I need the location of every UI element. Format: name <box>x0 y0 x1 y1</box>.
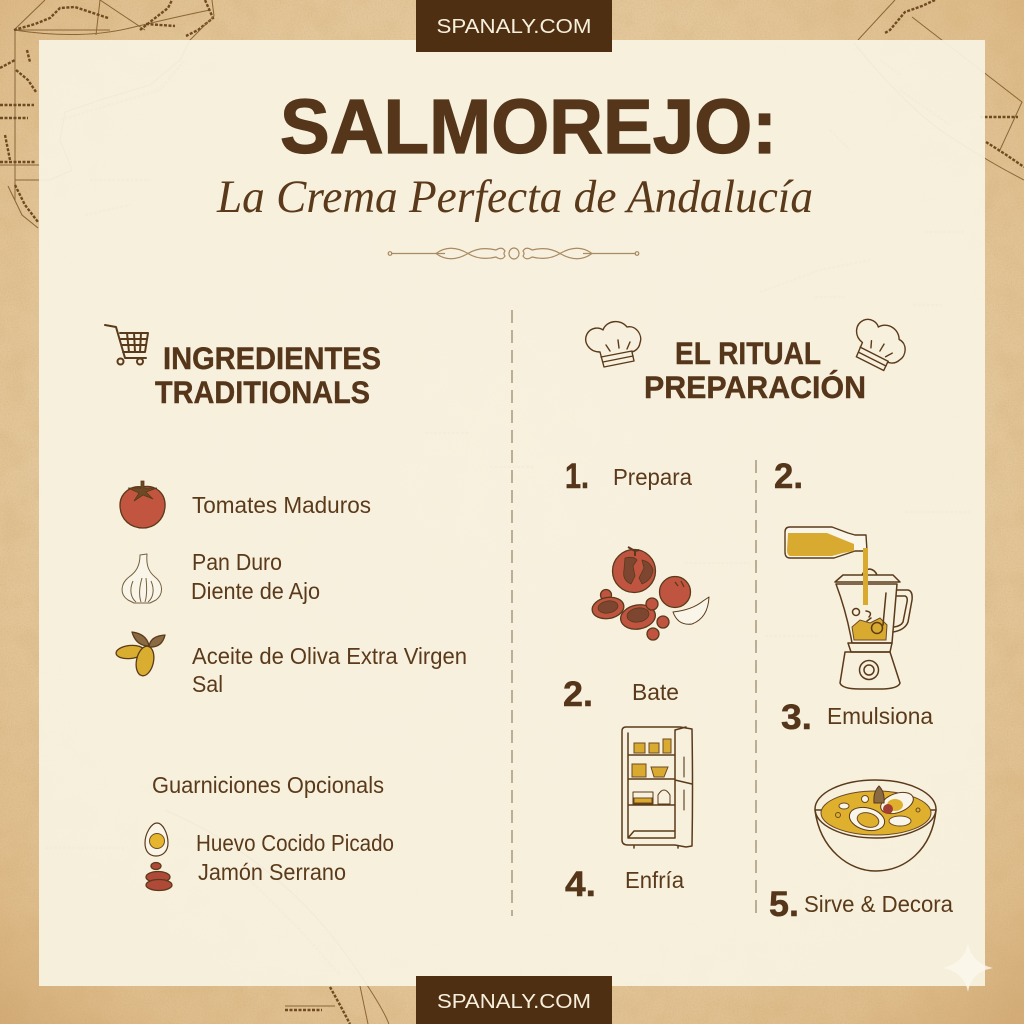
text: aceite, sal: Aceite de Oliva Extra Virgen <box>192 643 467 669</box>
bottom banner <box>416 976 612 1024</box>
text: pan duro, diente de ajo: Pan Duro <box>192 549 282 575</box>
step 5 label: 5. <box>769 885 799 924</box>
step 5 label <box>769 885 954 924</box>
text: tomates maduros: Tomates Maduros <box>192 492 371 518</box>
icon: shopping cart <box>105 325 148 364</box>
ornamental divider <box>388 248 639 259</box>
step 3 label: 3. <box>781 698 812 737</box>
text: pan duro, diente de ajo <box>191 549 320 604</box>
step 3 label: Emulsiona <box>827 703 934 729</box>
text: pan duro, diente de ajo: Diente de Ajo <box>191 578 320 604</box>
step 1 label: Prepara <box>613 464 693 490</box>
step 3 label <box>781 698 934 737</box>
heading: ingredientes: INGREDIENTES <box>163 340 381 376</box>
icon: chef hat right <box>842 310 913 379</box>
step divider <box>755 460 757 916</box>
text: aceite, sal: Sal <box>192 671 223 697</box>
panel: ingredients <box>105 325 467 890</box>
panel: preparation ritual <box>563 310 954 924</box>
bottom banner: SPANALY.COM <box>437 991 591 1013</box>
icon: oil bottle and blender <box>785 527 912 689</box>
title: SALMOREJO: <box>280 84 777 170</box>
icon: tomato <box>120 481 165 528</box>
step 5 label: Sirve & Decora <box>804 891 954 917</box>
heading: ingredientes <box>155 340 381 410</box>
text: aceite, sal <box>192 643 467 697</box>
subtitle: La Crema Perfecta de Andalucía <box>216 171 813 223</box>
subheading: guarniciones: Guarniciones Opcionals <box>152 772 384 798</box>
heading: el ritual <box>644 335 866 405</box>
text: jamon: Jamón Serrano <box>198 859 346 885</box>
icon: sparkle <box>943 943 993 992</box>
icon: cut tomatoes and garlic <box>590 547 709 640</box>
step 4 label <box>565 865 685 904</box>
heading: ingredientes: TRADITIONALS <box>155 374 370 410</box>
top banner <box>416 0 612 52</box>
step 1 label: 1. <box>565 457 589 496</box>
icon: olives <box>115 632 165 677</box>
heading: el ritual: EL RITUAL <box>675 335 821 371</box>
section divider <box>511 310 513 916</box>
icon: ham <box>146 862 172 890</box>
step 2 number: 2. <box>774 457 803 496</box>
text: huevo: Huevo Cocido Picado <box>196 830 394 856</box>
step 2 bate label: Bate <box>632 679 679 705</box>
icon: chef hat left <box>586 322 641 367</box>
step 1 label <box>565 457 693 496</box>
step 2 bate label: 2. <box>563 675 593 714</box>
step 2 bate label <box>563 675 679 714</box>
icon: salmorejo bowl <box>815 780 936 871</box>
step 4 label: 4. <box>565 865 596 904</box>
top banner: SPANALY.COM <box>436 16 592 38</box>
icon: garlic <box>122 554 162 603</box>
icon: open fridge <box>622 727 692 848</box>
icon: boiled egg <box>145 823 168 856</box>
step 4 label: Enfría <box>625 867 685 893</box>
heading: el ritual: PREPARACIÓN <box>644 369 866 405</box>
